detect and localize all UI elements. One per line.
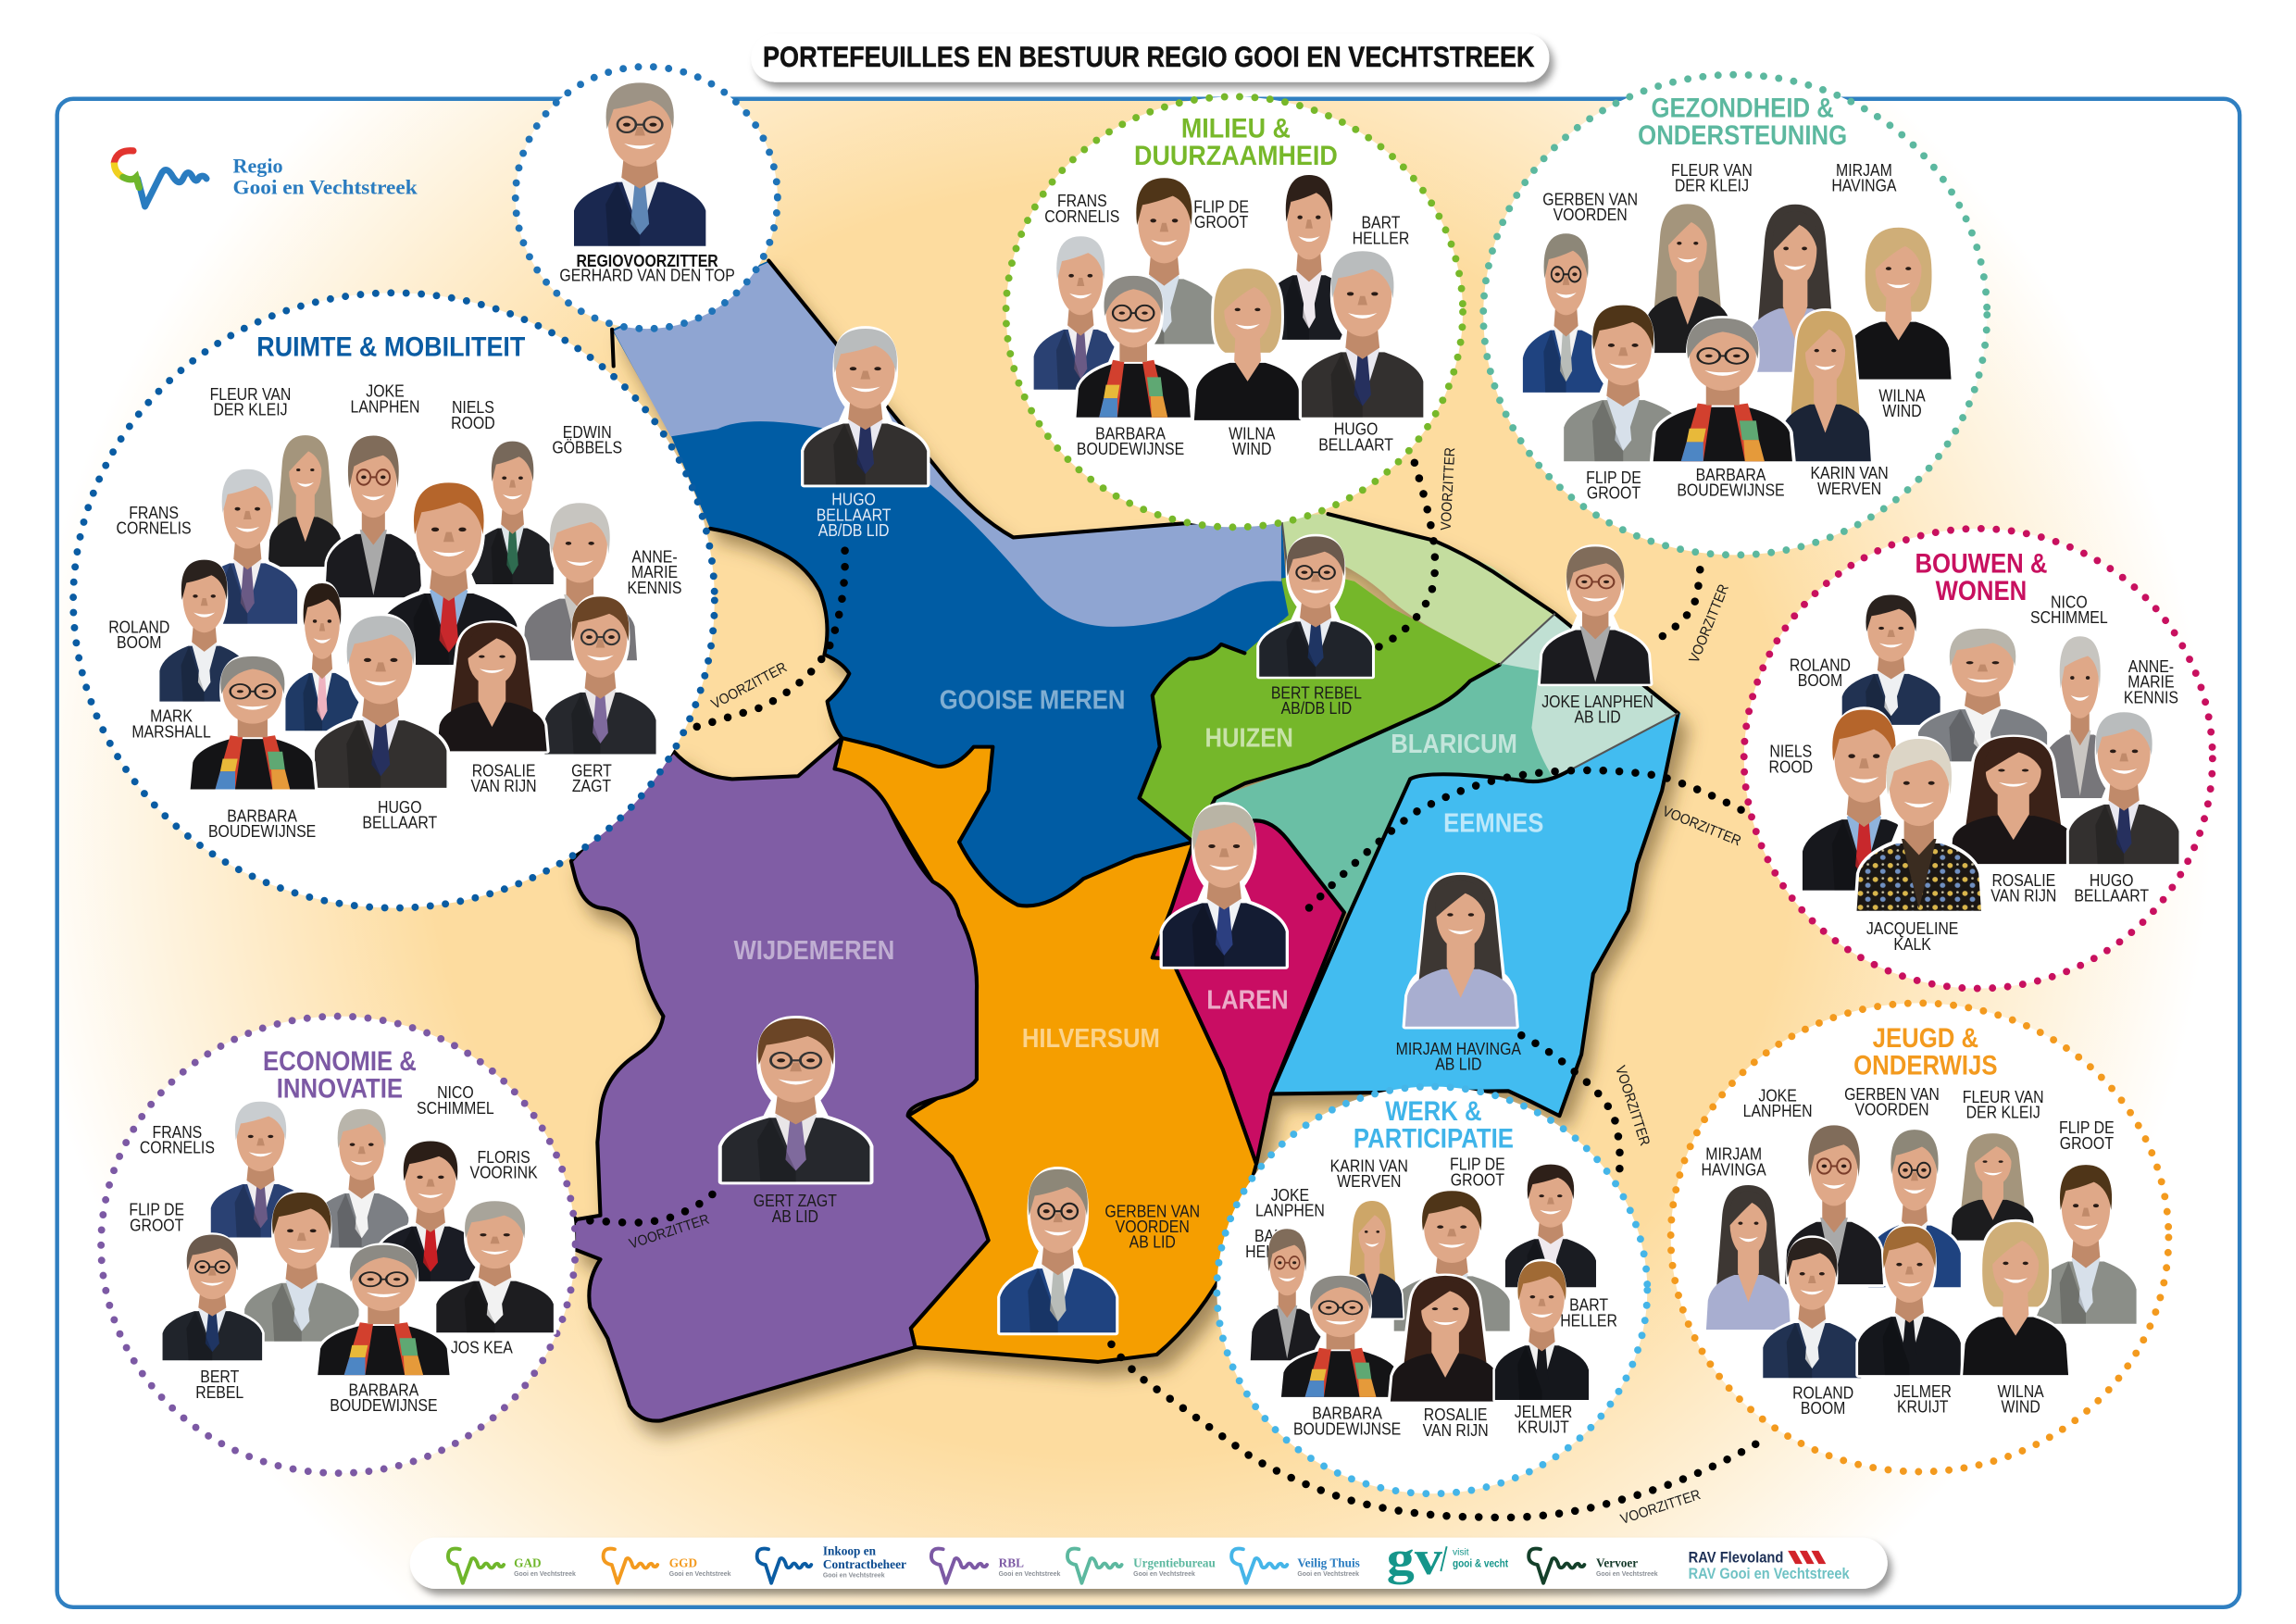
names: VAN RIJN xyxy=(1990,887,2056,906)
logo: Urgentiebureau: Urgentiebureau xyxy=(1133,1555,1216,1569)
portrait xyxy=(574,82,705,246)
panel: gezondheid en ondersteuning xyxy=(1483,75,1987,555)
logo: RAV Flevoland: RAV Flevoland xyxy=(1689,1550,1783,1567)
logo: RAV Flevoland: RAV Gooi en Vechtstreek xyxy=(1689,1566,1850,1582)
circle border xyxy=(1744,529,2213,989)
names xyxy=(129,1083,538,1415)
region name labels: EEMNES xyxy=(1443,807,1543,838)
logo: Veilig Thuis xyxy=(1231,1549,1360,1583)
border lines of map xyxy=(612,261,1678,1116)
names: KENNIS xyxy=(2124,689,2178,707)
logo: Inkoop en Contractbeheer: Contractbeheer xyxy=(823,1557,906,1571)
logo: Urgentiebureau: Gooi en Vechtstreek xyxy=(1133,1571,1195,1578)
heading: ECONOMIE & xyxy=(263,1046,417,1077)
names xyxy=(1255,1156,1617,1440)
region: Blaricum water xyxy=(1500,615,1678,781)
names: BELLAART xyxy=(1318,436,1393,455)
names: ANNE- xyxy=(631,547,678,567)
names: HAVINGA xyxy=(1831,177,1897,195)
names: SCHIMMEL xyxy=(2030,608,2108,627)
names: KRUIJT xyxy=(1517,1418,1569,1437)
names: NIELS xyxy=(1769,743,1812,761)
names: BOUDEWIJNSE xyxy=(330,1396,438,1415)
voorzitter captions: VOORZITTER xyxy=(709,660,790,713)
names xyxy=(1542,161,1926,503)
portraits xyxy=(1523,204,1952,461)
region: Blaricum xyxy=(1216,614,1679,916)
names: KALK xyxy=(1893,935,1932,954)
logo: RBL: Gooi en Vechtstreek xyxy=(999,1571,1061,1578)
region: water IJmeer xyxy=(614,262,1281,627)
names: GROOT xyxy=(1587,484,1641,503)
names: GERBEN VAN xyxy=(1542,190,1638,209)
title xyxy=(751,33,1549,82)
names: CORNELIS xyxy=(140,1139,215,1157)
voorzitter captions: VOORZITTER xyxy=(1687,582,1732,666)
names: FLIP DE xyxy=(1586,468,1641,487)
heading: RUIMTE & MOBILITEIT xyxy=(256,331,525,362)
names: FLIP DE xyxy=(1193,197,1249,217)
region: Huizen xyxy=(1140,575,1500,842)
panel: milieu en duurzaamheid xyxy=(1006,96,1463,527)
title: PORTEFEUILLES EN BESTUUR REGIO GOOI EN VECHTSTREEK xyxy=(763,40,1535,73)
logo: GAD: GAD xyxy=(514,1555,542,1569)
names: REBEL xyxy=(195,1383,243,1402)
names: WIND xyxy=(1232,440,1271,458)
names: JOS KEA xyxy=(451,1338,513,1357)
names: VOORDEN xyxy=(1554,206,1628,224)
names: VOORDEN xyxy=(1854,1101,1929,1119)
map portrait: Bert Rebel: AB/DB LID xyxy=(1281,699,1352,718)
names: FLEUR VAN xyxy=(210,385,291,404)
legend bar with partner logos xyxy=(410,1531,1888,1589)
map portrait: Hugo Bellaart: BELLAART xyxy=(817,506,891,525)
names: BARBARA xyxy=(1696,466,1766,484)
logo: Inkoop en Contractbeheer xyxy=(757,1544,906,1583)
region: Hilversum xyxy=(835,738,1256,1362)
logo: Inkoop en Contractbeheer: Inkoop en xyxy=(823,1544,877,1558)
region: Gooise Meren xyxy=(612,261,1289,906)
map portrait: Mirjam Havinga xyxy=(1396,875,1522,1074)
names: MARK xyxy=(150,707,193,726)
names: JOKE xyxy=(366,382,405,401)
names: VAN RIJN xyxy=(1423,1421,1489,1440)
names: BELLAART xyxy=(2074,887,2149,906)
region: Eemnes xyxy=(1271,713,1681,1116)
names: WERVEN xyxy=(1817,480,1881,498)
circle border xyxy=(516,67,778,329)
heading: ONDERWIJS xyxy=(1853,1050,1998,1081)
heading: DUURZAAMHEID xyxy=(1134,141,1338,170)
region name labels: HUIZEN xyxy=(1204,722,1293,753)
panel: bouwen en wonen xyxy=(1744,529,2213,989)
names: JOKE xyxy=(1758,1086,1797,1106)
names: FRANS xyxy=(1057,192,1107,210)
map portrait: Joke Lanphen xyxy=(1541,546,1653,727)
names: WIND xyxy=(2002,1398,2040,1417)
heading: BOUWEN & xyxy=(1915,548,2048,579)
panel: regiovoorzitter xyxy=(516,67,778,329)
names: HUGO xyxy=(2090,871,2133,890)
names behind portraits: HELLER xyxy=(1245,1243,1303,1261)
logo: visit gooi & vecht: gooi & vecht xyxy=(1453,1556,1508,1569)
names: BOOM xyxy=(1801,1399,1845,1418)
circle border xyxy=(1006,96,1463,527)
names: BOUDEWIJNSE xyxy=(1077,440,1184,458)
names: BARBARA xyxy=(1312,1405,1383,1423)
names: ROSALIE xyxy=(1424,1405,1488,1424)
region name labels: GOOISE MEREN xyxy=(940,684,1125,715)
map portrait: Joke Lanphen: JOKE LANPHEN xyxy=(1541,693,1653,711)
names: MIRJAM xyxy=(1836,161,1892,180)
logo: Regio Gooi en Vechtstreek: Regio xyxy=(232,155,283,178)
voorzitter captions: VOORZITTER xyxy=(628,1212,711,1253)
names: KENNIS xyxy=(627,579,682,597)
names: FLIP DE xyxy=(1450,1156,1505,1174)
map portrait: Mirjam Havinga: AB LID xyxy=(1435,1055,1481,1074)
map portrait: Hugo Bellaart xyxy=(804,329,927,540)
names: BOUDEWIJNSE xyxy=(208,822,316,841)
logo: Regio Gooi en Vechtstreek: Gooi en Vechtstreek xyxy=(232,176,418,199)
region name labels: HILVERSUM xyxy=(1022,1023,1160,1053)
region name labels: LAREN xyxy=(1206,984,1289,1015)
names: GROOT xyxy=(1194,213,1248,231)
names: JACQUELINE xyxy=(1866,919,1958,938)
panel: werk en participatie xyxy=(1217,1087,1647,1493)
circle border xyxy=(1217,1087,1647,1493)
names: ROSALIE xyxy=(1991,871,2055,890)
map portrait: Gerben van Voorden: GERBEN VAN xyxy=(1104,1202,1200,1221)
names: BARBARA xyxy=(227,806,298,826)
names: GROOT xyxy=(130,1217,183,1235)
names: NICO xyxy=(2051,593,2088,612)
names: HUGO xyxy=(1334,420,1378,439)
names: BERT xyxy=(200,1368,239,1386)
logo: GGD xyxy=(604,1549,731,1583)
logo: Vervoer: Vervoer xyxy=(1596,1555,1638,1569)
names: WILNA xyxy=(1998,1382,2044,1401)
names: DER KLEIJ xyxy=(1675,177,1749,195)
names: BART xyxy=(1569,1296,1608,1315)
region: Laren xyxy=(1153,820,1344,1164)
names: ANNE- xyxy=(2128,657,2174,676)
map portrait: regiovoorzitter Laren xyxy=(1163,805,1286,967)
map portrait: Gert Zagt: AB LID xyxy=(772,1207,818,1226)
logo: Vervoer xyxy=(1529,1549,1658,1583)
names: JELMER xyxy=(1515,1403,1572,1421)
names: BOUDEWIJNSE xyxy=(1293,1419,1401,1439)
logo: RBL xyxy=(931,1549,1061,1583)
voorzitter captions: VOORZITTER xyxy=(1619,1487,1703,1528)
logo: GAD xyxy=(448,1549,576,1583)
names: WILNA xyxy=(1878,386,1926,406)
logo: Regio Gooi en Vechtstreek xyxy=(114,151,418,206)
names: ROLAND xyxy=(108,618,169,637)
names: ROLAND xyxy=(1790,656,1851,675)
connector lines voorzitter xyxy=(574,463,1766,1518)
names: KARIN VAN xyxy=(1330,1156,1408,1176)
names: BARBARA xyxy=(1095,425,1167,443)
names: BARBARA xyxy=(348,1380,419,1400)
heading: INNOVATIE xyxy=(277,1073,403,1104)
heading: JEUGD & xyxy=(1873,1022,1978,1053)
names: KRUIJT xyxy=(1897,1398,1948,1417)
voorzitter captions: VOORZITTER xyxy=(1439,447,1459,531)
logo: visit gooi & vecht xyxy=(1387,1531,1508,1585)
names: WERVEN xyxy=(1337,1172,1401,1191)
portraits xyxy=(1034,175,1423,420)
circle border xyxy=(1671,1003,2168,1472)
map portrait: Hugo Bellaart: HUGO xyxy=(831,491,876,509)
names: DER KLEIJ xyxy=(1966,1104,2040,1122)
names: GÖBBELS xyxy=(552,439,622,457)
map portrait: Gerben van Voorden: AB LID xyxy=(1129,1233,1176,1252)
portraits xyxy=(163,1102,554,1375)
names: HAVINGA xyxy=(1702,1160,1766,1180)
map portrait: Mirjam Havinga: MIRJAM HAVINGA xyxy=(1396,1040,1522,1058)
names: JOKE xyxy=(1271,1186,1309,1205)
names: VAN RIJN xyxy=(471,777,537,795)
names: EDWIN xyxy=(563,423,612,442)
portraits xyxy=(1803,594,2178,911)
thin inner borders xyxy=(1281,516,1678,770)
names: NIELS xyxy=(452,398,494,417)
names: HELLER xyxy=(1353,230,1409,248)
names: KARIN VAN xyxy=(1810,464,1889,482)
logo: Vervoer: Gooi en Vechtstreek xyxy=(1596,1571,1658,1578)
region name labels: WIJDEMEREN xyxy=(734,935,894,965)
logo: Urgentiebureau xyxy=(1067,1549,1216,1583)
heading: GEZONDHEID & xyxy=(1651,93,1834,123)
heading: WERK & xyxy=(1385,1095,1482,1126)
names: CORNELIS xyxy=(1044,207,1119,226)
names: SCHIMMEL xyxy=(417,1099,494,1118)
portraits xyxy=(159,435,656,789)
names: HUGO xyxy=(378,798,422,817)
names: MARSHALL xyxy=(131,723,211,742)
region: Wijdemeren xyxy=(571,738,989,1421)
names: FLORIS xyxy=(477,1148,530,1167)
circle border xyxy=(1483,75,1987,555)
map portrait: Hugo Bellaart: AB/DB LID xyxy=(818,521,889,540)
logo: visit gooi & vecht: gv xyxy=(1387,1531,1443,1585)
names: GROOT xyxy=(2060,1134,2114,1153)
names: ROOD xyxy=(1769,758,1813,777)
logo: RBL: RBL xyxy=(999,1555,1024,1569)
panel: economie en innovatie xyxy=(101,1017,576,1473)
names: WILNA xyxy=(1229,425,1276,443)
name: GERHARD VAN DEN TOP xyxy=(559,267,735,285)
logo: visit gooi & vecht: visit xyxy=(1453,1548,1469,1558)
names: LANPHEN xyxy=(351,397,419,417)
heading: WONEN xyxy=(1936,575,2027,606)
map portrait: Gert Zagt: GERT ZAGT xyxy=(754,1192,837,1210)
names: ROSALIE xyxy=(472,761,535,780)
region shapes xyxy=(571,261,1681,1421)
names: ROLAND xyxy=(1792,1384,1853,1403)
names: LANPHEN xyxy=(1743,1102,1813,1120)
names: LANPHEN xyxy=(1255,1202,1325,1220)
names xyxy=(1702,1085,2115,1418)
names: DER KLEIJ xyxy=(213,401,288,419)
names: GROOT xyxy=(1451,1171,1504,1190)
names xyxy=(108,382,682,841)
names: GERT xyxy=(571,761,612,780)
logo: GAD: Gooi en Vechtstreek xyxy=(514,1571,576,1578)
names: GERBEN VAN xyxy=(1844,1085,1940,1104)
legend background xyxy=(410,1538,1888,1589)
names behind portraits: BART xyxy=(1254,1227,1293,1245)
circle border xyxy=(101,1017,576,1473)
portraits xyxy=(1706,1125,2137,1378)
names: BOUDEWIJNSE xyxy=(1677,481,1785,500)
names: FLIP DE xyxy=(129,1201,184,1219)
panel: ruimte en mobiliteit xyxy=(73,293,715,908)
map of the region xyxy=(571,261,1681,1421)
map portrait: Bert Rebel xyxy=(1259,536,1372,718)
region: Huizen water xyxy=(1281,514,1555,665)
region name labels xyxy=(734,684,1543,1053)
logo: Veilig Thuis: Veilig Thuis xyxy=(1297,1555,1360,1569)
heading: MILIEU & xyxy=(1181,114,1291,144)
map portrait: Joke Lanphen: AB LID xyxy=(1574,708,1621,727)
map portrait: Gert Zagt xyxy=(722,1018,869,1226)
logo: Inkoop en Contractbeheer: Gooi en Vechtstreek xyxy=(823,1572,885,1579)
names: BOOM xyxy=(1798,671,1842,690)
logo: Veilig Thuis: Gooi en Vechtstreek xyxy=(1297,1571,1359,1578)
names: MARIE xyxy=(631,563,678,581)
portraits xyxy=(1251,1165,1596,1402)
voorzitter captions: VOORZITTER xyxy=(1660,804,1743,849)
names: FRANS xyxy=(153,1123,202,1142)
caption: REGIOVOORZITTER xyxy=(576,252,718,270)
panel: jeugd en onderwijs xyxy=(1671,1003,2168,1472)
names: HELLER xyxy=(1560,1311,1617,1330)
heading: ONDERSTEUNING xyxy=(1638,119,1847,150)
names: WIND xyxy=(1882,402,1922,420)
names: CORNELIS xyxy=(117,519,192,538)
names xyxy=(1769,593,2178,954)
names: VOORINK xyxy=(470,1164,538,1182)
names: FLEUR VAN xyxy=(1671,161,1753,180)
names: ZAGT xyxy=(572,777,611,795)
names: BOOM xyxy=(117,633,161,652)
names xyxy=(1044,192,1409,458)
names: MARIE xyxy=(2128,673,2175,692)
names: FLEUR VAN xyxy=(1963,1088,2044,1106)
names: ROOD xyxy=(451,414,495,432)
names: MIRJAM xyxy=(1705,1145,1762,1164)
voorzitter captions xyxy=(628,447,1743,1528)
logo: RAV Flevoland xyxy=(1689,1550,1850,1582)
logo: GGD: Gooi en Vechtstreek xyxy=(669,1571,731,1578)
logo: GGD: GGD xyxy=(669,1555,697,1569)
names: JELMER xyxy=(1893,1382,1952,1401)
map portrait: Gerben van Voorden: VOORDEN xyxy=(1116,1218,1190,1236)
names: BELLAART xyxy=(362,814,437,832)
heading: PARTICIPATIE xyxy=(1354,1123,1514,1154)
region name labels: BLARICUM xyxy=(1391,729,1517,758)
circle border xyxy=(73,293,715,908)
voorzitter captions: VOORZITTER xyxy=(1612,1064,1653,1148)
names: FLIP DE xyxy=(2059,1118,2115,1137)
map portrait: Bert Rebel: BERT REBEL xyxy=(1271,684,1362,703)
map portrait: Gerben van Voorden xyxy=(1000,1169,1200,1332)
names: FRANS xyxy=(129,504,179,522)
names: NICO xyxy=(437,1083,474,1102)
names: BART xyxy=(1361,214,1400,232)
